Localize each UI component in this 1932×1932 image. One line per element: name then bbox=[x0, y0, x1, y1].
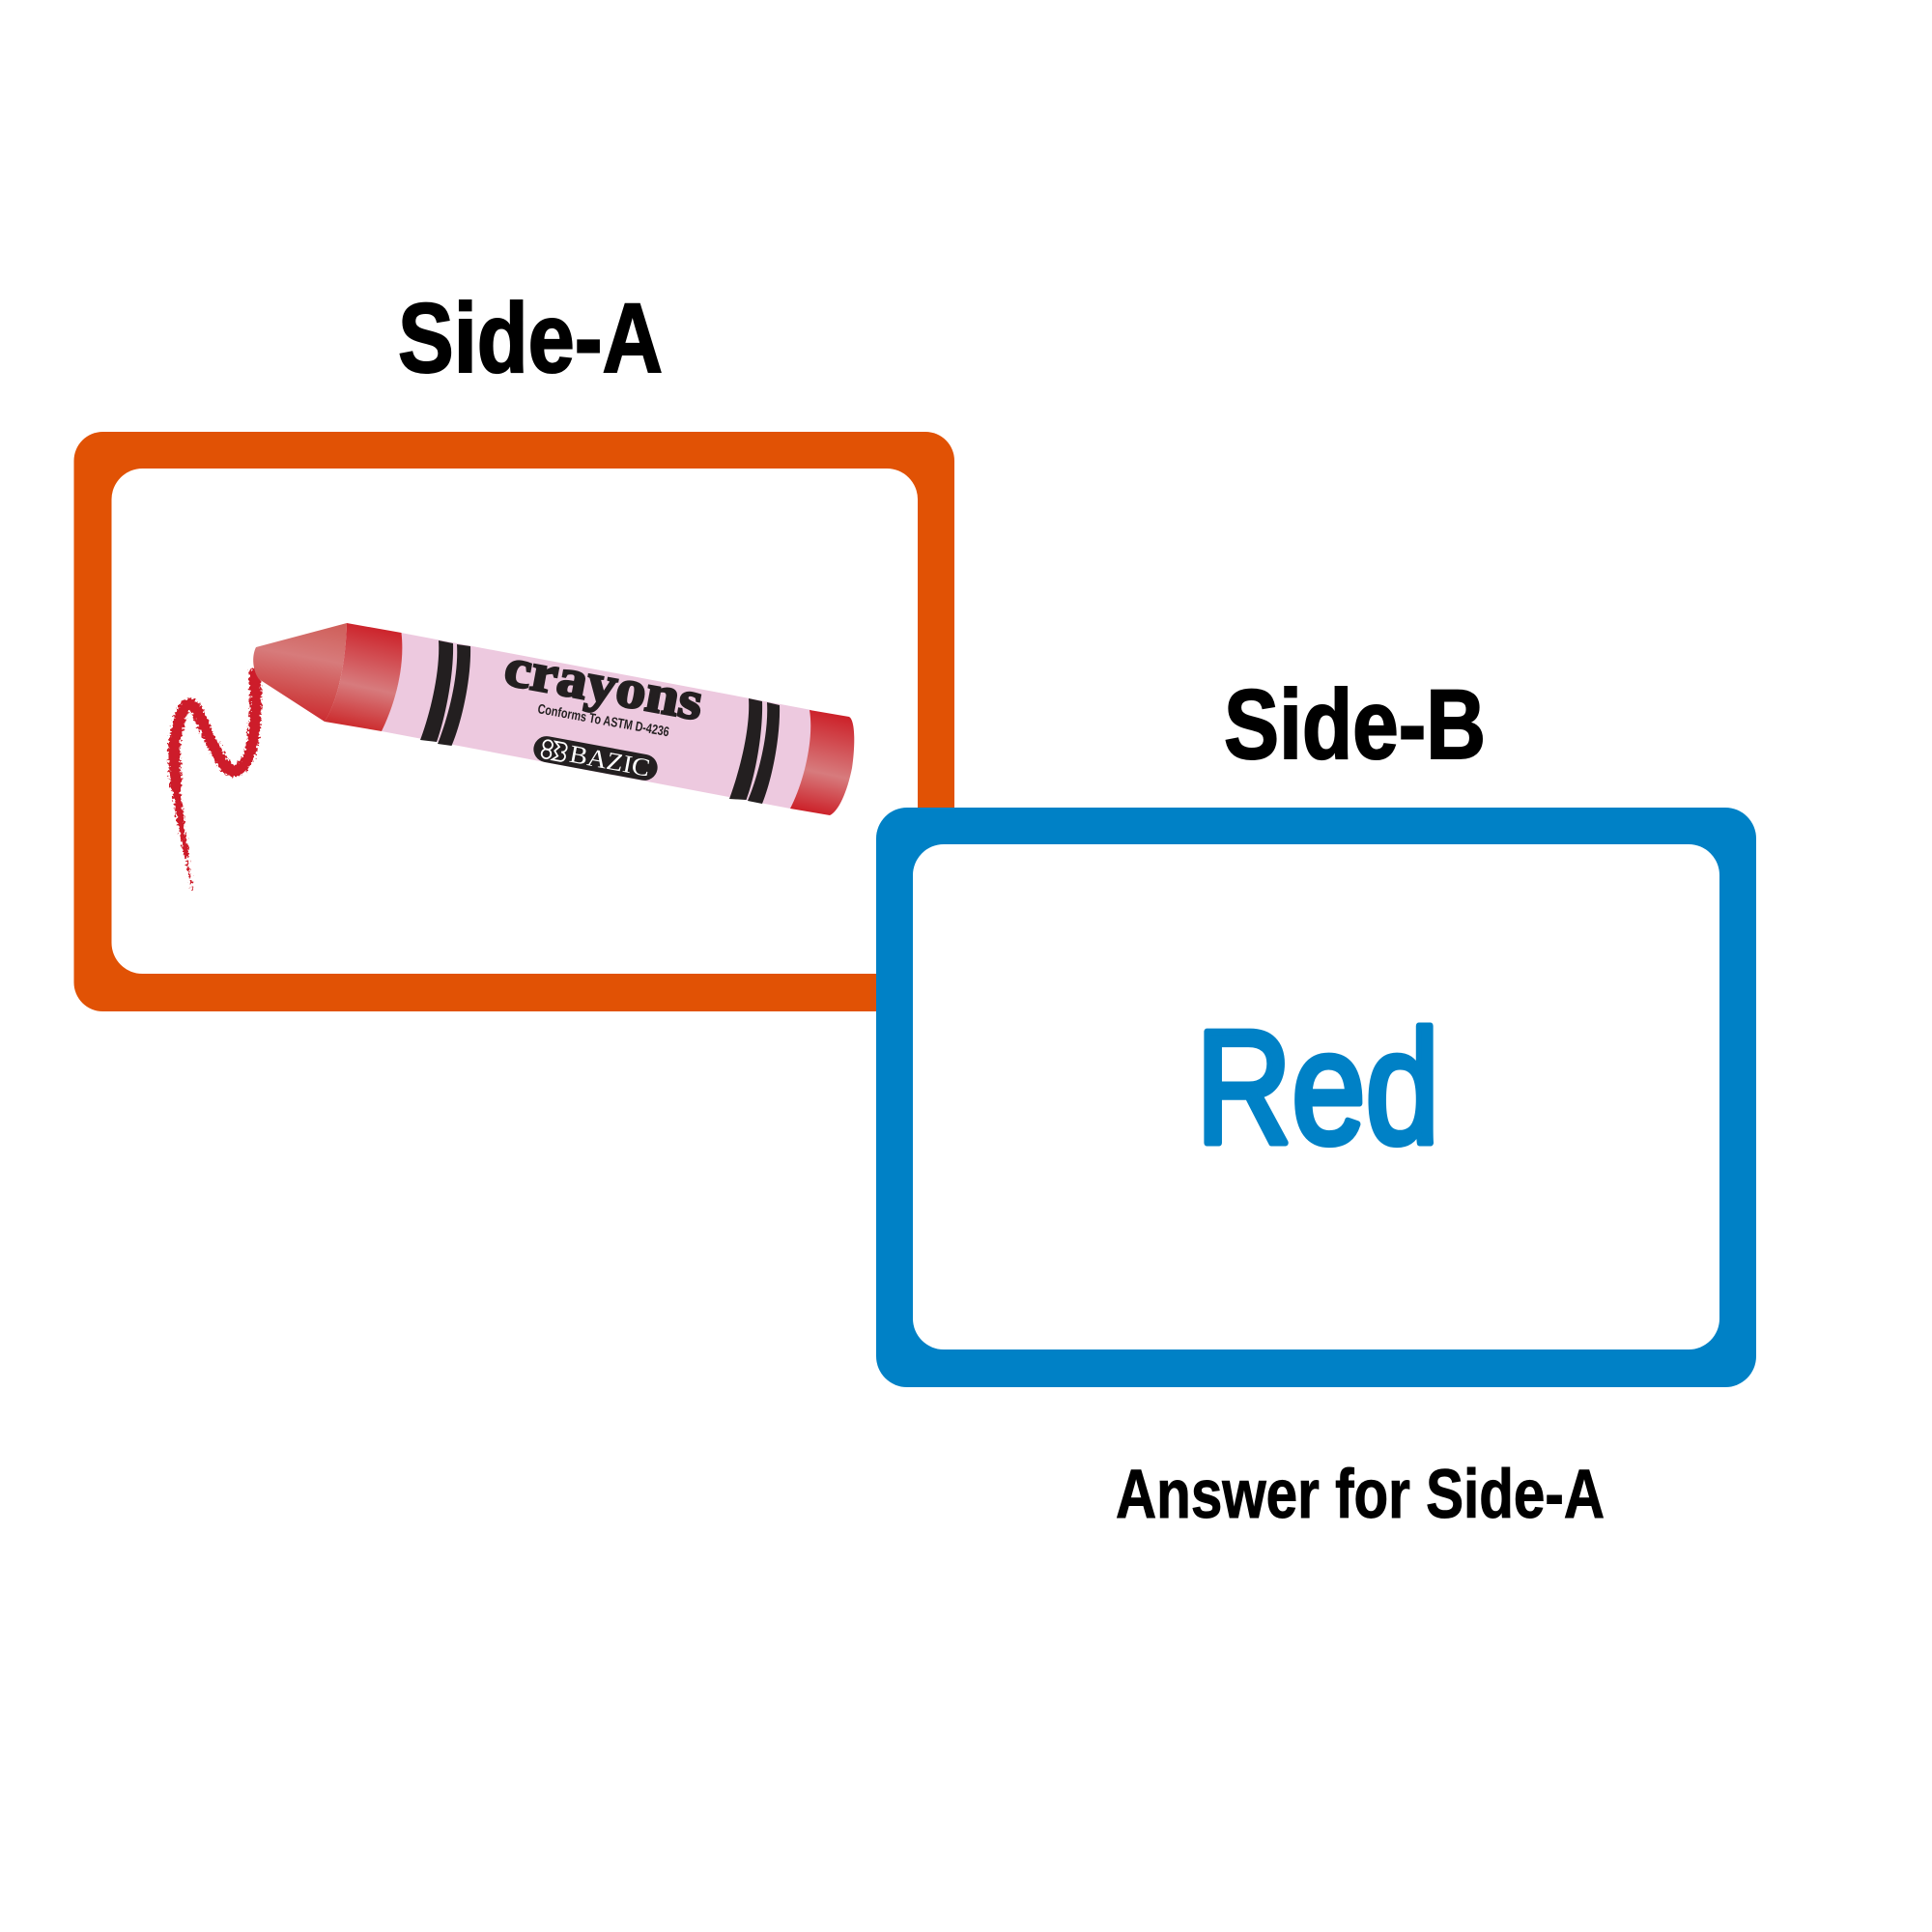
icon: red crayon with scribble bbox=[174, 623, 854, 889]
crayon scribble line bbox=[174, 673, 256, 889]
crayon label: crayons: crayons bbox=[500, 638, 707, 732]
answer word: Red: Red bbox=[1196, 998, 1439, 1178]
BAZIC logo pill bbox=[531, 733, 660, 783]
crayon right red band bbox=[790, 710, 854, 815]
heading: Side-B: Side-B bbox=[1224, 669, 1486, 780]
panel: Side-A orange card bbox=[73, 432, 954, 1011]
crayon label: conformance: Conforms To ASTM D-4236 bbox=[536, 700, 670, 739]
caption: Answer for Side-A: Answer for Side-A bbox=[1116, 1457, 1605, 1533]
heading: Side-A: Side-A bbox=[398, 283, 663, 393]
crayon cone tip bbox=[253, 623, 347, 722]
crayon black stripes bbox=[420, 640, 780, 804]
crayon left red band bbox=[325, 623, 402, 731]
BAZIC logo mark bbox=[541, 739, 568, 762]
panel: Side-B blue card bbox=[876, 808, 1756, 1387]
crayon pink paper wrapper bbox=[382, 633, 811, 809]
BAZIC wordmark: BAZIC bbox=[567, 740, 652, 782]
